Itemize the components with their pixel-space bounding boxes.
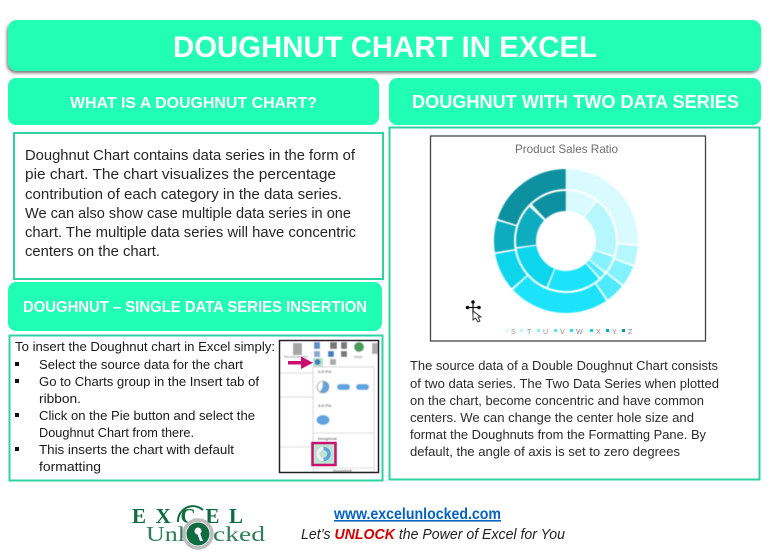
panel: insertion steps: Go to Charts group in the Insert tab of <box>39 374 259 389</box>
text block: double doughnut description: default, the angle of axis is set to zero degrees <box>410 444 680 459</box>
heading: what is a doughnut chart: WHAT IS A DOUGHNUT CHART? <box>70 95 317 112</box>
logo: excel unlocked: cked <box>213 522 266 546</box>
icon: highlighted doughnut button <box>312 443 336 465</box>
panel: insertion steps <box>10 336 382 480</box>
text block: double doughnut description <box>410 358 719 459</box>
chart: product sales ratio double doughnut <box>430 136 706 341</box>
legend: T <box>527 329 532 336</box>
legend: U <box>543 329 548 336</box>
excel ribbon screenshot: Recommended <box>284 355 308 359</box>
panel: definition text: contribution of each category in the data series. <box>25 187 342 203</box>
inner ring <box>509 184 623 298</box>
heading: single data series insertion <box>8 282 382 331</box>
text block: double doughnut description: of two data series. The Two Data Series when plotted <box>410 376 719 391</box>
icon: move cursor <box>466 301 481 322</box>
excel ribbon screenshot <box>280 340 378 473</box>
outer ring <box>479 154 653 328</box>
legend: W <box>576 329 583 336</box>
legend <box>506 329 633 336</box>
heading: single data series insertion: DOUGHNUT – SINGLE DATA SERIES INSERTION <box>23 299 367 316</box>
logo: excel unlocked: EXCEL <box>132 504 243 528</box>
heading: what is a doughnut chart <box>8 78 379 125</box>
logo: excel unlocked: Unl <box>146 522 185 546</box>
text block: double doughnut description: format the Doughnuts from the Formatting Pane. By <box>410 427 706 442</box>
panel: two data series <box>390 128 760 480</box>
excel ribbon screenshot: Doughnut <box>318 436 338 441</box>
excel ribbon screenshot: Doughnut <box>333 468 353 473</box>
heading: doughnut with two data series <box>389 78 761 125</box>
excel ribbon screenshot: Maps <box>354 355 363 359</box>
text block: double doughnut description: centers. We can change the center hole size and <box>410 410 694 425</box>
website link: www.excelunlocked.com <box>333 506 501 523</box>
heading: doughnut with two data series: DOUGHNUT WITH TWO DATA SERIES <box>412 91 739 112</box>
panel: insertion steps: To insert the Doughnut chart in Excel simply: <box>15 339 275 354</box>
legend: Y <box>612 329 617 336</box>
panel: insertion steps: formatting <box>39 459 101 474</box>
text block: double doughnut description: on the chart, become concentric and have common <box>410 393 704 408</box>
panel: insertion steps: Click on the Pie button and select the <box>39 408 255 423</box>
panel: insertion steps: This inserts the chart with default <box>39 442 234 457</box>
panel: insertion steps: Doughnut Chart from there. <box>39 425 194 440</box>
title banner <box>8 20 761 71</box>
panel: definition text: centers on the chart. <box>25 244 160 260</box>
panel: definition text: Doughnut Chart contains data series in the form of <box>25 148 356 164</box>
chart: product sales ratio double doughnut: Product Sales Ratio <box>515 142 618 156</box>
panel: definition text <box>14 133 383 279</box>
panel: definition text: chart. The multiple data series will have concentric <box>25 225 356 241</box>
panel: insertion steps: ribbon. <box>39 391 81 406</box>
text block: double doughnut description: The source data of a Double Doughnut Chart consists <box>410 358 718 373</box>
excel ribbon screenshot: 2-D Pie <box>318 369 332 374</box>
panel: definition text: pie chart. The chart visualizes the percentage <box>25 167 336 183</box>
legend: V <box>560 329 565 336</box>
logo: excel unlocked <box>132 504 266 548</box>
legend: Z <box>628 329 633 336</box>
arrow: pointing at pie button <box>288 356 313 369</box>
panel: definition text: We can also show case multiple data series in one <box>25 206 351 222</box>
excel ribbon screenshot: 3-D Pie <box>318 403 332 408</box>
tagline: Let’s UNLOCK the Power of Excel for You <box>301 527 565 543</box>
legend: S <box>511 329 516 336</box>
title banner: DOUGHNUT CHART IN EXCEL <box>173 31 597 64</box>
panel: insertion steps: Select the source data for the chart <box>39 357 243 372</box>
legend: X <box>596 329 601 336</box>
